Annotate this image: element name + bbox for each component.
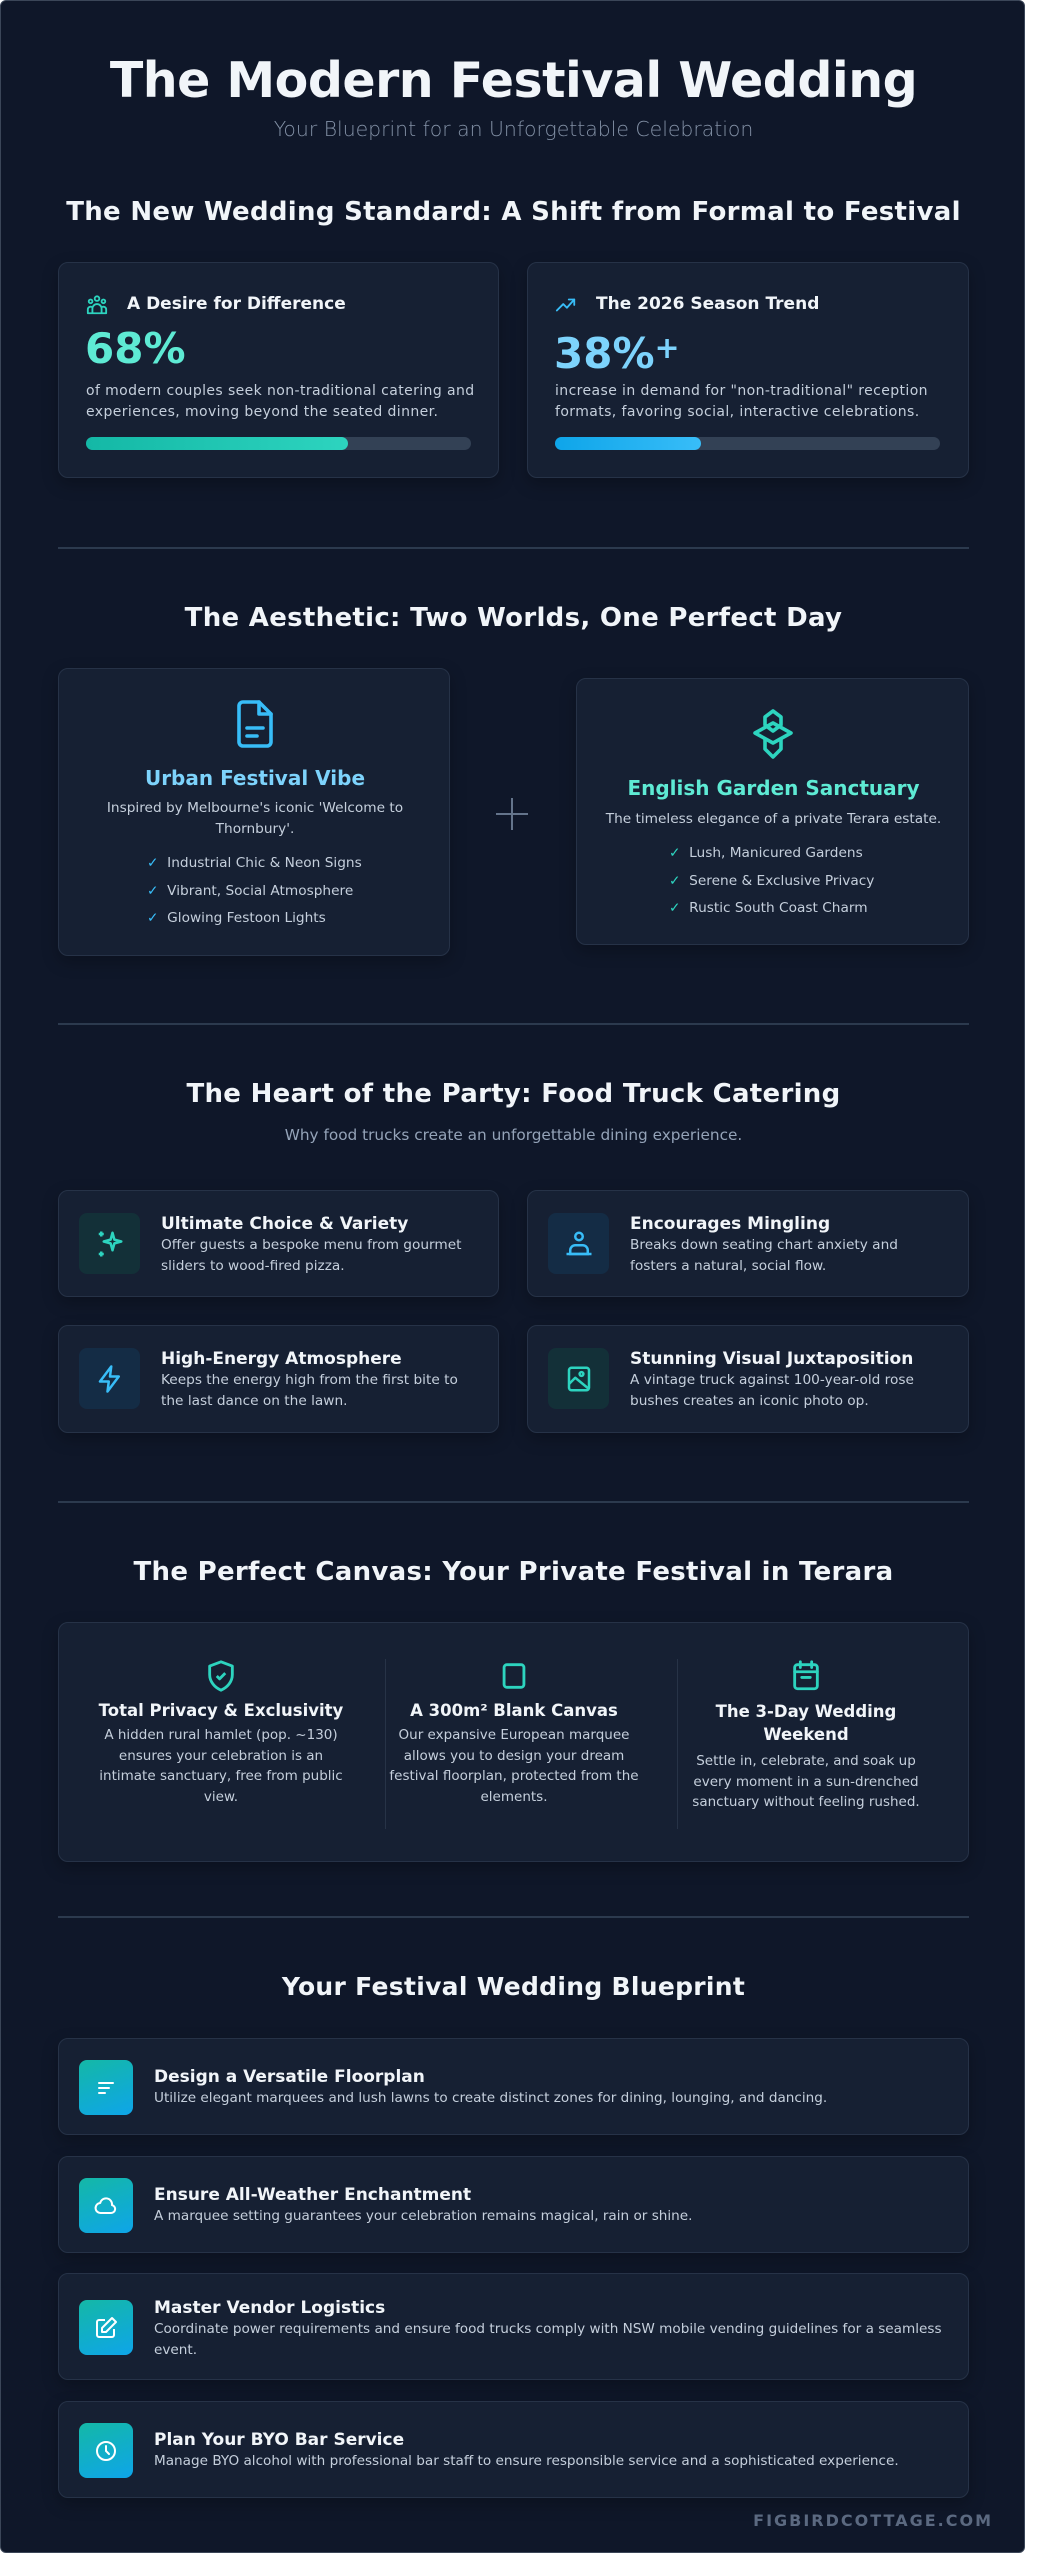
list [147, 855, 362, 926]
text: Breaks down seating chart anxiety and [630, 1237, 898, 1253]
text [630, 1349, 914, 1409]
step: all-weather [58, 2156, 969, 2253]
text [154, 2185, 692, 2224]
big number: 68% [85, 324, 186, 373]
feature: blank canvas: A 300m² Blank Canvas [410, 1701, 618, 1720]
feature: 3-day weekend: The 3-Day Wedding Weekend [716, 1702, 896, 1744]
heading: Urban Festival Vibe [145, 766, 365, 790]
footer: site name: FIGBIRDCOTTAGE.COM [753, 2511, 993, 2530]
icon: image [548, 1348, 609, 1409]
subheading: Why food trucks create an unforgettable dining experience. [285, 1126, 742, 1144]
list: ✓ Rustic South Coast Charm [669, 900, 868, 916]
icon: person [548, 1213, 609, 1274]
icon: shield [208, 1660, 234, 1692]
icon: cloud [79, 2178, 133, 2233]
description: of modern couples seek non-traditional catering and experiences, moving beyond the seated dinner. [86, 383, 475, 420]
feature: blank canvas [389, 1663, 639, 1804]
text [154, 2067, 827, 2106]
feature: 3-day weekend: Settle in, celebrate, and soak up every moment in a sun-drenched sanctuary without feeling rushed. [692, 1753, 920, 1810]
card: visual juxtaposition [527, 1325, 969, 1433]
heading: food truck catering: The Heart of the Party: Food Truck Catering [186, 1079, 841, 1109]
list: ✓ Glowing Festoon Lights [147, 910, 326, 926]
feature: 3-day weekend [692, 1660, 920, 1810]
heading: English Garden Sanctuary [627, 776, 920, 800]
icon: clock [79, 2423, 133, 2478]
text: Master Vendor Logistics [154, 2298, 385, 2318]
description: Inspired by Melbourne's iconic 'Welcome to Thornbury'. [107, 800, 403, 837]
feature: privacy: A hidden rural hamlet (pop. ~130) ensures your celebration is an intimate sanctuary, free from public view. [99, 1727, 343, 1804]
icon: sparkles [79, 1213, 140, 1274]
big number: 38%+ [554, 329, 680, 378]
progress bar [555, 437, 940, 450]
panel: canvas features [58, 1622, 969, 1862]
heading: perfect canvas: The Perfect Canvas: Your Private Festival in Terara [134, 1557, 893, 1587]
card title: A Desire for Difference [127, 294, 346, 314]
icon: calendar [793, 1660, 819, 1690]
card title: The 2026 Season Trend [596, 294, 819, 314]
heading: blueprint: Your Festival Wedding Blueprint [282, 1972, 745, 2001]
text: Manage BYO alcohol with professional bar staff to ensure responsible service and a sophisticated experience. [154, 2453, 899, 2469]
description: The timeless elegance of a private Terara estate. [606, 811, 941, 827]
icon: plus [496, 798, 528, 830]
list: ✓ Vibrant, Social Atmosphere [147, 882, 353, 898]
card: encourages mingling [527, 1190, 969, 1297]
heading: new wedding standard: The New Wedding Standard: A Shift from Formal to Festival [66, 197, 961, 227]
progress bar [86, 437, 471, 450]
heading: aesthetic: The Aesthetic: Two Worlds, One Perfect Day [185, 603, 842, 633]
list: ✓ Serene & Exclusive Privacy [669, 872, 874, 888]
stat card: 2026 trend [527, 262, 969, 478]
text: Design a Versatile Floorplan [154, 2067, 425, 2087]
text: Utilize elegant marquees and lush lawns to create distinct zones for dining, lounging, and dancing. [154, 2090, 827, 2106]
card: ultimate choice [58, 1190, 499, 1297]
icon: square [502, 1663, 526, 1689]
title: The Modern Festival Wedding [110, 52, 917, 109]
text: Plan Your BYO Bar Service [154, 2430, 404, 2450]
icon: trend arrow [556, 298, 576, 312]
feature: privacy: Total Privacy & Exclusivity [99, 1701, 343, 1720]
text [154, 2430, 899, 2469]
subtitle: Your Blueprint for an Unforgettable Celebration [274, 117, 753, 141]
icon: garden emblem [753, 709, 793, 759]
panel: urban festival vibe [58, 668, 450, 956]
text: fosters a natural, social flow. [630, 1258, 826, 1274]
feature: privacy [98, 1660, 343, 1804]
list [669, 845, 874, 916]
text: Keeps the energy high from the first bite to [161, 1372, 458, 1388]
text: Stunning Visual Juxtaposition [630, 1349, 913, 1369]
text [161, 1349, 458, 1409]
icon: people [86, 295, 108, 314]
text: Ultimate Choice & Variety [161, 1214, 408, 1234]
text [161, 1214, 462, 1274]
text: High-Energy Atmosphere [161, 1349, 402, 1369]
step: vendor logistics [58, 2273, 969, 2380]
text: A vintage truck against 100-year-old rose [630, 1372, 914, 1388]
text: the last dance on the lawn. [161, 1393, 348, 1409]
description: increase in demand for "non-traditional" reception formats, favoring social, interactive celebrations. [555, 383, 928, 420]
text: A marquee setting guarantees your celebration remains magical, rain or shine. [154, 2208, 692, 2224]
card: high energy [58, 1325, 499, 1433]
icon: document [237, 700, 273, 748]
stat card: desire for difference [58, 262, 499, 478]
icon: edit [79, 2300, 133, 2355]
text: Offer guests a bespoke menu from gourmet [161, 1237, 462, 1253]
text: sliders to wood-fired pizza. [161, 1258, 345, 1274]
text: Encourages Mingling [630, 1214, 830, 1234]
list: ✓ Industrial Chic & Neon Signs [147, 855, 362, 871]
text [154, 2298, 942, 2358]
text [630, 1214, 898, 1274]
step: floorplan [58, 2038, 969, 2135]
feature: blank canvas: Our expansive European marquee allows you to design your dream festival floorplan, protected from the elements. [389, 1727, 639, 1804]
text: Ensure All-Weather Enchantment [154, 2185, 471, 2205]
panel: english garden sanctuary [576, 678, 969, 945]
list: ✓ Lush, Manicured Gardens [669, 845, 863, 861]
icon: lightning [79, 1348, 140, 1409]
step: BYO bar [58, 2401, 969, 2498]
text: Coordinate power requirements and ensure food trucks comply with NSW mobile vending guidelines for a seamless event. [154, 2321, 942, 2358]
icon: lines [79, 2060, 133, 2115]
text: bushes creates an iconic photo op. [630, 1393, 869, 1409]
